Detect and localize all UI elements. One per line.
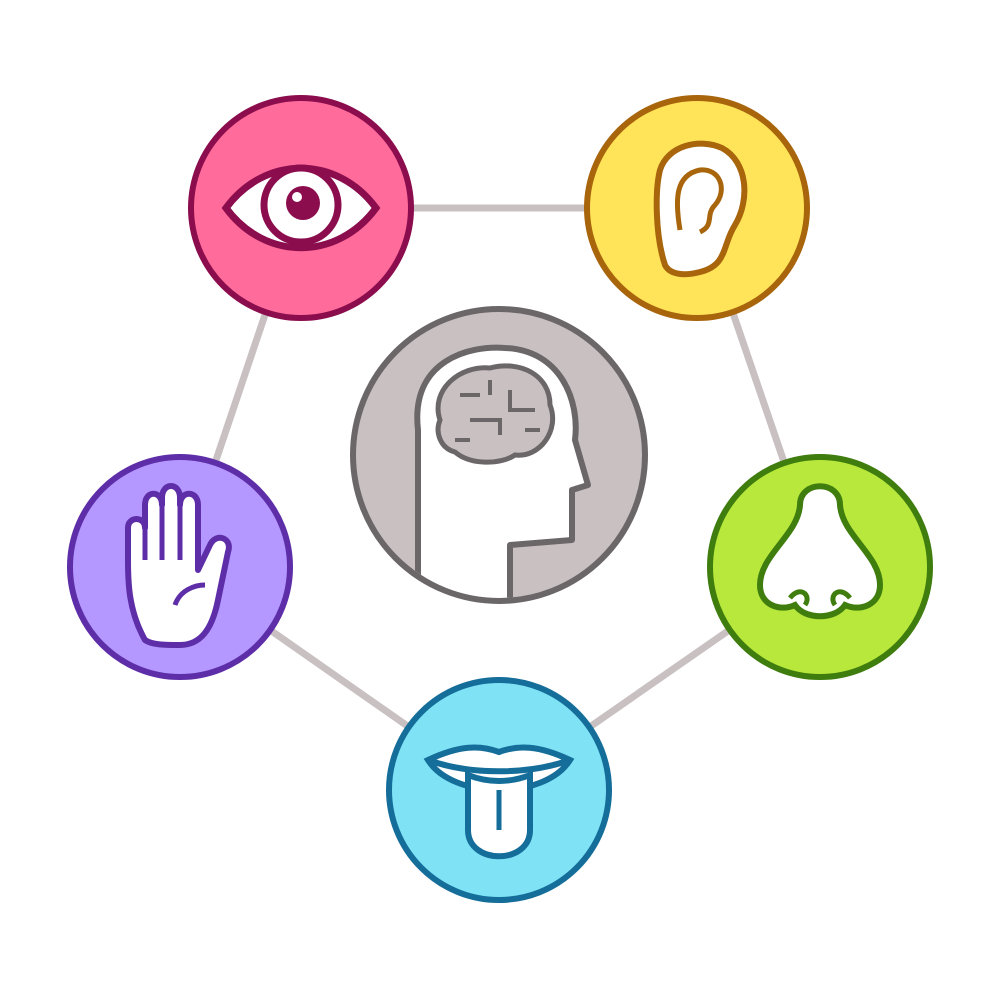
connecting pentagon lines — [180, 208, 820, 790]
icon: ear (hearing) — [587, 98, 807, 318]
icon: nose (smell) — [710, 457, 930, 677]
icon: hand (touch) — [70, 457, 290, 677]
icon: tongue (taste) — [389, 680, 609, 900]
icon: eye (sight) — [191, 98, 411, 318]
center: head with brain — [353, 309, 645, 640]
diagram: five senses around brain — [67, 95, 933, 903]
